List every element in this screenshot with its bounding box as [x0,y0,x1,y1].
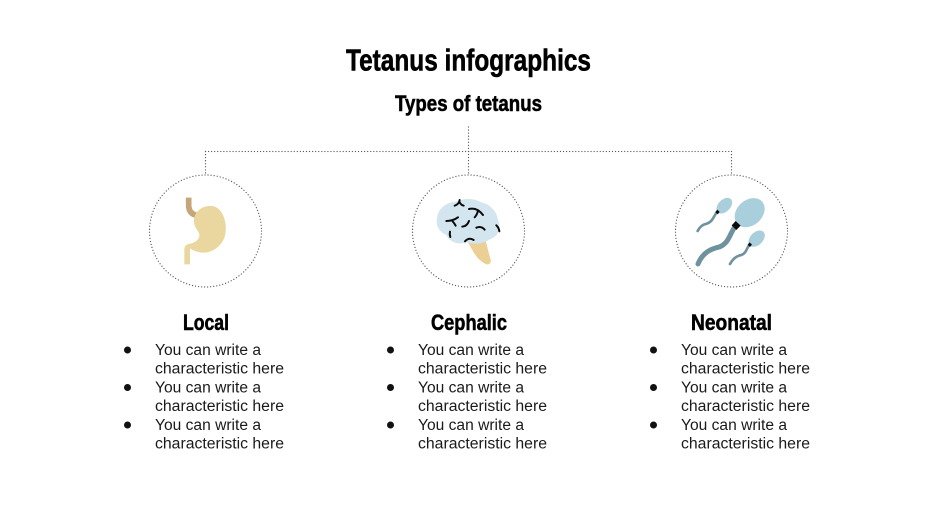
bullet list: cephalic [387,342,547,452]
bullet list: local: characteristic here [155,361,284,378]
subtitle: Types of tetanus [395,91,542,116]
panel: cephalic [387,175,547,452]
bullet list: neonatal [650,342,810,452]
bullet list: local [124,342,284,452]
connector lines [206,127,732,175]
bullet list: cephalic: You can write a [418,342,524,359]
heading: Cephalic: Cephalic [431,310,507,335]
heading: Local: Local [183,310,229,335]
icon: brain in dotted circle [412,175,524,287]
bullet list: cephalic: characteristic here [418,436,547,452]
bullet list: cephalic: You can write a [418,379,524,396]
heading: Neonatal: Neonatal [691,310,772,335]
bullet list: neonatal: You can write a [681,379,787,396]
bullet list: cephalic: You can write a [418,417,524,434]
bullet list: local: characteristic here [155,398,284,415]
bullet list: neonatal: characteristic here [681,361,810,378]
bullet list: neonatal: characteristic here [681,398,810,415]
icon: stomach in dotted circle [150,175,262,287]
bullet list: neonatal: characteristic here [681,436,810,452]
bullet list: cephalic: characteristic here [418,361,547,378]
bullet list: local: You can write a [155,342,261,359]
bullet list: local: You can write a [155,379,261,396]
bullet list: neonatal: You can write a [681,342,787,359]
bullet list: local: You can write a [155,417,261,434]
panel: neonatal [650,175,810,452]
panel: local [124,175,284,452]
title: Tetanus infographics [346,42,591,78]
icon: sperm cells in dotted circle [676,175,788,287]
bullet list: cephalic: characteristic here [418,398,547,415]
bullet list: neonatal: You can write a [681,417,787,434]
bullet list: local: characteristic here [155,436,284,452]
